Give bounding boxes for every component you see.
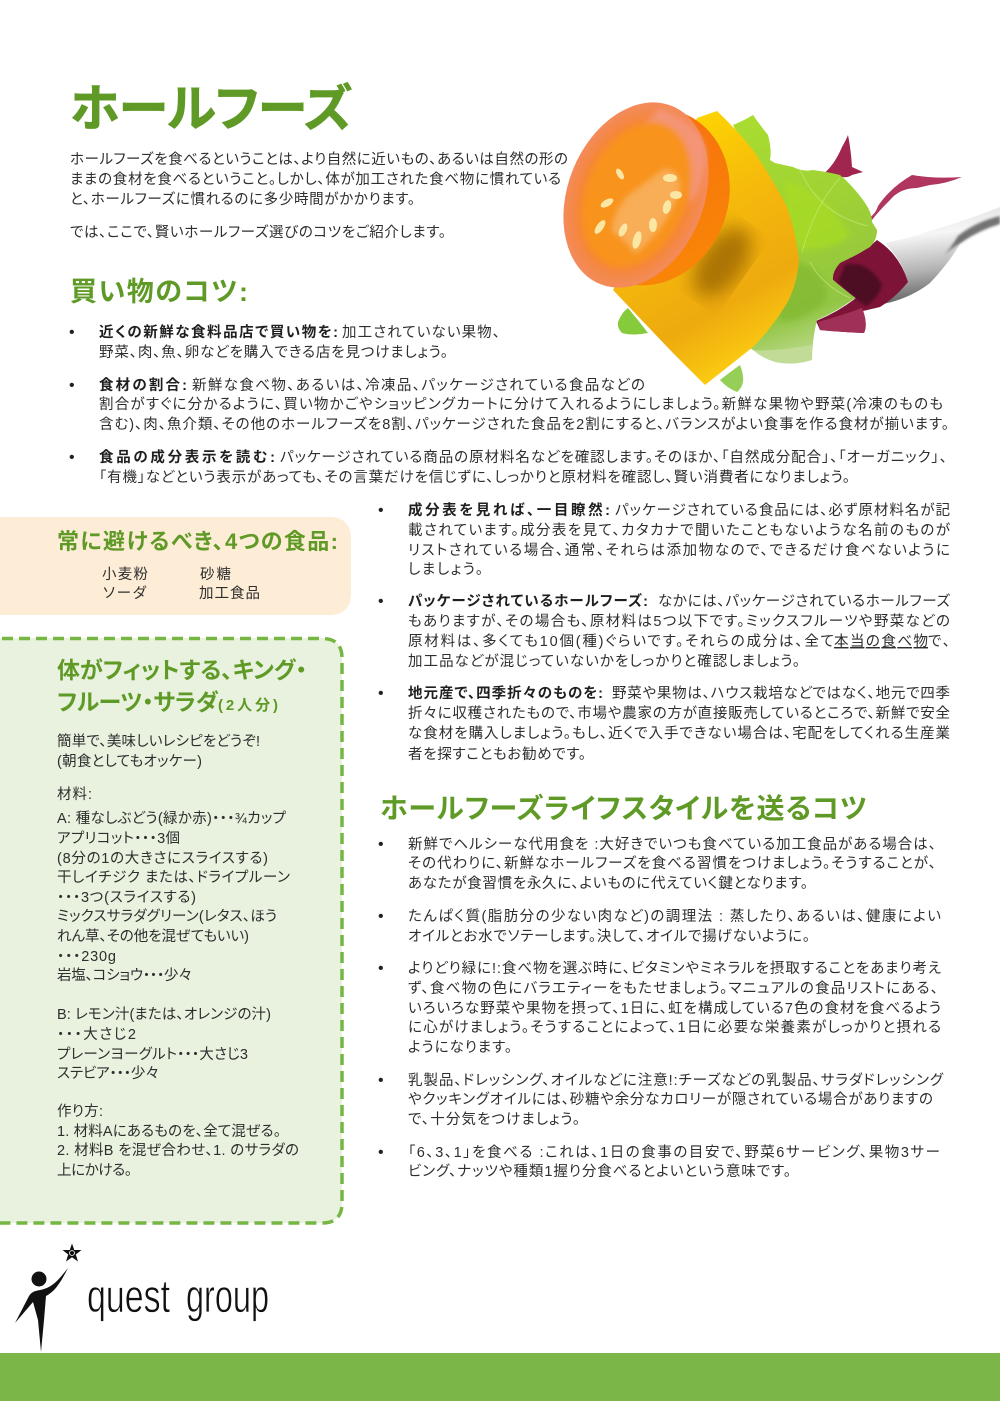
right column tips list: 地元産で、四季折々のものを: (408, 684, 603, 702)
food list: 小麦粉 (102, 566, 148, 583)
tomato cut face (537, 81, 735, 309)
shopping tips list: • (69, 324, 75, 341)
intro text: ままの食材を食べるということ。しかし、体が加工された食べ物に慣れている (70, 170, 561, 188)
lifestyle tips list: で、十分気をつけましょう。 (408, 1111, 580, 1128)
logo wordmark: quest (87, 1270, 170, 1322)
right column tips list: 野菜や果物は、ハウス栽培などではなく、地元で四季 (612, 685, 950, 702)
right column tips list: パッケージされている食品には、必ず原材料名が記 (615, 502, 950, 519)
lifestyle tips list: あなたが食習慣を永久に、よいものに代えていく鍵となります。 (408, 874, 808, 892)
logo wordmark (87, 1270, 269, 1322)
ingredients: 干しイチジク または、ドライプルーン (57, 869, 290, 886)
icon: reaching figure with star (15, 1244, 82, 1352)
right column tips list: で、 (928, 634, 950, 650)
directions (57, 1103, 299, 1179)
directions: 2. 材料B を混ぜ合わせ、1. のサラダの (57, 1142, 299, 1159)
ingredients: ・・・230g (57, 949, 116, 965)
right column tips list: 加工品などが混じっていないかをしっかりと確認しましょう。 (408, 653, 800, 670)
lifestyle tips list: • (378, 836, 384, 853)
lifestyle tips list: 新鮮でヘルシーな代用食を :大好きでいつも食べている加工食品がある場合は、 (408, 836, 936, 853)
recipe heading (57, 657, 307, 715)
lifestyle tips list: その代わりに、新鮮なホールフーズを食べる習慣をつけましょう。そうすることが、 (408, 854, 936, 872)
lifestyle tips list: • (378, 1072, 384, 1089)
lifestyle tips list: • (378, 908, 384, 925)
ingredients: ミックスサラダグリーン(レタス、ほう (57, 908, 277, 925)
panel: fruit salad recipe (0, 638, 342, 1223)
ingredients: ・・・大さじ2 (57, 1026, 136, 1043)
shopping tips list: 野菜、肉、魚、卵などを購入できる店を見つけましょう。 (99, 344, 448, 361)
shopping tips list: • (69, 377, 75, 394)
right column tips list: しましょう。 (408, 562, 483, 578)
recipe heading: フルーツ・サラダ (57, 689, 219, 715)
lifestyle tips list (378, 836, 944, 1180)
right column tips list: パッケージされているホールフーズ: (408, 592, 648, 610)
right column tips list: もありますが、その場合も、原材料は5つ以下です。ミックスフルーツや野菜などの (408, 613, 950, 630)
right column tips list (378, 501, 951, 763)
shopping tips list: 近くの新鮮な食料品店で買い物を: (99, 323, 338, 341)
lifestyle tips list: • (378, 960, 384, 977)
lifestyle tips list: 「6、3、1」を食べる :これは、1日の食事の目安で、野菜6サービング、果物3サー (408, 1144, 940, 1161)
food list: 砂糖 (200, 566, 231, 583)
lifestyle tips list: ず、食べ物の色にバラエティーをもたせましょう。マニュアルの食品リストにある、 (408, 980, 938, 997)
footer band (0, 1353, 1000, 1401)
fork (878, 207, 1000, 305)
tomato (537, 81, 756, 310)
ingredients (57, 786, 290, 1082)
right column tips list: リストされている場合、通常、それらは添加物なので、できるだけ食べないように (408, 542, 950, 559)
food list: ソーダ (103, 585, 147, 602)
food list (102, 566, 260, 602)
shopping tips list: 「有機」などという表示があっても、その言葉だけを信じずに、しっかりと原材料を確認し、賢い消費者になりましょう。 (99, 469, 850, 486)
logo: quest group (15, 1244, 269, 1352)
ingredients: ・・・3つ(スライスする) (57, 889, 196, 906)
small leaves under the pepper (618, 308, 648, 334)
lifestyle tips list: 乳製品、ドレッシング、オイルなどに注意!:チーズなどの乳製品、サラダドレッシング (408, 1072, 944, 1089)
recipe intro: 簡単で、美味しいレシピをどうぞ! (57, 733, 260, 750)
right column tips list: 載されています。成分表を見て、カタカナで聞いたこともないような名前のものが (408, 522, 951, 539)
directions: 上にかける。 (57, 1162, 132, 1179)
intro text (70, 151, 568, 241)
lifestyle tips list: よりどり緑に!:食べ物を選ぶ時に、ビタミンやミネラルを摂取することをあまり考え (408, 960, 941, 977)
panel: four foods to avoid (0, 517, 351, 615)
ingredients: B: レモン汁(または、オレンジの汁) (57, 1006, 271, 1023)
directions: 作り方: (57, 1103, 103, 1120)
directions: 1. 材料Aにあるものを、全て混ぜる。 (57, 1123, 281, 1140)
food photo: tomato, pepper and lettuce on a fork (537, 81, 1000, 392)
panel heading: 常に避けるべき、4つの食品: (57, 529, 338, 554)
red lettuce sprigs (816, 135, 962, 333)
lifestyle tips list: ようになります。 (408, 1039, 512, 1056)
shopping tips list: 食品の成分表示を読む: (99, 448, 275, 466)
right column tips list: 本当の食べ物 (834, 633, 928, 650)
lifestyle tips list: • (378, 1144, 384, 1161)
intro text: と、ホールフーズに慣れるのに多少時間がかかります。 (70, 190, 415, 208)
lifestyle tips list: ビング、ナッツや種類1握り分食べるとよいという意味です。 (408, 1163, 791, 1180)
title: ホールフーズ (70, 81, 352, 137)
shopping tips list: 含む)、肉、魚介類、その他のホールフーズを8割、パッケージされた食品を2割にすると、バランスがよい食事を作る食材が揃います。 (99, 416, 949, 433)
recipe intro: (朝食としてもオッケー) (57, 753, 202, 770)
ingredients: (8分の1の大きさにスライスする) (57, 850, 268, 867)
shopping tips list: パッケージされている商品の原材料名などを確認します。そのほか、「自然成分配合」、「オーガニック」、 (280, 449, 947, 466)
tomato skin (544, 84, 756, 310)
heading: shopping tips: 買い物のコツ: (70, 277, 248, 307)
shopping tips list: 食材の割合: (99, 376, 187, 394)
right column tips list: 者を探すこともお勧めです。 (408, 746, 586, 763)
lifestyle tips list: オイルとお水でソテーします。決して、オイルで揚げないように。 (408, 928, 810, 945)
right column tips list: • (378, 502, 384, 519)
right column tips list: な食材を購入しましょう。もし、近くで入手できない場合は、宅配をしてくれる生産業 (408, 725, 950, 742)
lifestyle tips list: に心がけましょう。そうすることによって、1日に必要な栄養素がしっかりと摂れる (408, 1018, 941, 1036)
recipe heading: 体がフィットする、キング・ (57, 657, 307, 683)
intro text: では、ここで、賢いホールフーズ選びのコツをご紹介します。 (70, 224, 446, 241)
right column tips list: 折々に収穫されたもので、市場や農家の方が直接販売しているところで、新鮮で安全 (408, 705, 950, 722)
right column tips list: なかには、パッケージされているホールフーズ (658, 593, 950, 610)
shopping tips list: 新鮮な食べ物、あるいは、冷凍品、パッケージされている食品などの (192, 377, 645, 394)
ingredients: プレーンヨーグルト・・・大さじ3 (57, 1046, 248, 1063)
food list: 加工食品 (199, 585, 260, 602)
ingredients: ステビア・・・少々 (57, 1065, 159, 1082)
shopping tips list: 加工されていない果物、 (342, 324, 500, 341)
ingredients: 材料: (57, 786, 92, 803)
right column tips list: • (378, 593, 384, 610)
ingredients: アプリコット・・・3個 (57, 830, 180, 847)
ingredients: れん草、その他を混ぜてもいい) (57, 928, 249, 945)
lifestyle tips list: いろいろな野菜や果物を摂って、1日に、虹を構成している7色の食材を食べるよう (408, 1000, 941, 1017)
shopping tips list (69, 323, 949, 486)
heading: whole foods lifestyle tips: ホールフーズライフスタイルを送るコツ (380, 792, 867, 824)
lifestyle tips list: たんぱく質(脂肪分の少ない肉など)の調理法 : 蒸したり、あるいは、健康によい (408, 907, 941, 925)
shopping tips list: 割合がすぐに分かるように、買い物かごやショッピングカートに分けて入れるようにしましょう。新鮮な果物や野菜(冷凍のものも (99, 396, 943, 413)
logo wordmark: group (186, 1270, 269, 1322)
right column tips list: 原材料は、多くても10個(種)ぐらいです。それらの成分は、全て (408, 632, 834, 650)
ingredients: 岩塩、コショウ・・・少々 (57, 967, 192, 984)
right column tips list: • (378, 685, 384, 702)
lifestyle tips list: やクッキングオイルには、砂糖や余分なカロリーが隠されている場合がありますの (408, 1091, 933, 1108)
ingredients: A: 種なしぶどう(緑か赤)・・・¾カップ (57, 810, 287, 827)
green lettuce (618, 115, 877, 392)
intro text: ホールフーズを食べるということは、より自然に近いもの、あるいは自然の形の (70, 151, 568, 168)
shopping tips list: • (69, 449, 75, 466)
yellow pepper (613, 111, 799, 385)
recipe heading: (2人分) (218, 697, 278, 714)
recipe intro (57, 733, 260, 770)
right column tips list: 成分表を見れば、一目瞭然: (408, 501, 610, 519)
